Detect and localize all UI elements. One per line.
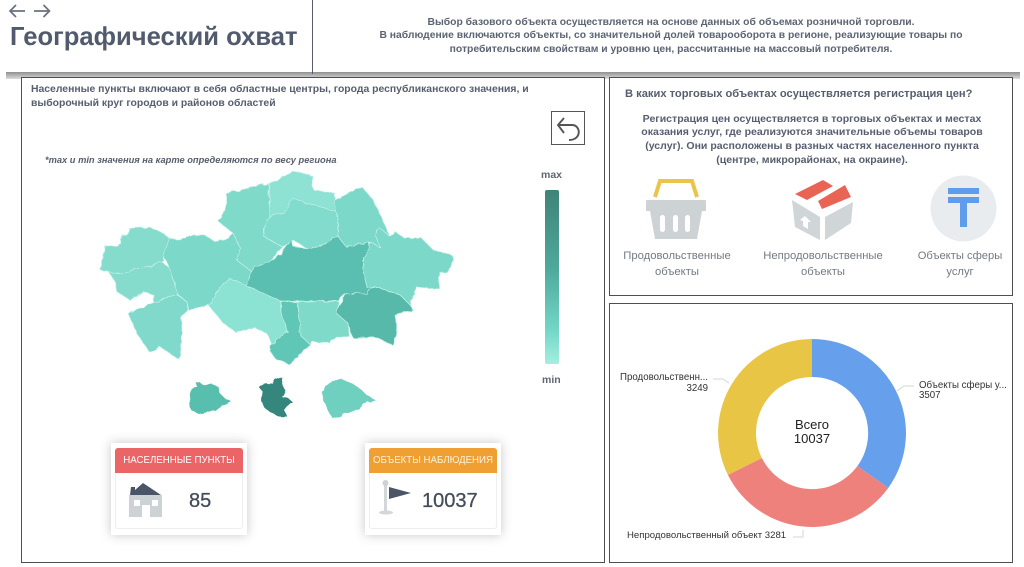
icon: undo button <box>551 111 585 145</box>
city: Almaty city <box>258 377 292 417</box>
region: Almaty <box>337 286 413 345</box>
title: Географический охват <box>10 22 298 50</box>
map description: выборочный круг городов и районов областей <box>31 98 276 109</box>
icon: back and forward arrows <box>8 4 51 18</box>
label: non-food objects <box>763 250 883 278</box>
label: services value: Объекты сферы у... <box>919 380 1007 391</box>
header description <box>379 16 963 55</box>
panel description <box>641 112 983 166</box>
region: Zhambyl <box>297 301 350 345</box>
header description: В наблюдение включаются объекты, со значительной долей товарооборота в регионе, реализующие товары по <box>379 30 963 41</box>
card header <box>369 448 497 473</box>
label: food value: 3249 <box>686 382 708 394</box>
label: service objects: Объекты сферы <box>918 250 1002 262</box>
panel: donut chart <box>609 303 1013 563</box>
map description <box>31 84 529 109</box>
label: food objects <box>623 250 731 278</box>
legend gradient bar <box>545 190 559 364</box>
stat card: settlements <box>111 443 247 535</box>
region: Turkistan <box>269 302 311 365</box>
label: service objects <box>918 250 1002 278</box>
region: Karaganda <box>245 235 373 301</box>
leader lines <box>713 379 914 537</box>
map footnote: *max и min значения на карте определяются по весу региона <box>45 155 337 165</box>
map of regions <box>99 170 454 418</box>
card header <box>115 448 243 473</box>
label: food objects: Продовольственные <box>623 250 731 262</box>
header description: потребительским свойствам и уровню цен, рассчитанные на массовый потребителя. <box>450 44 892 55</box>
label: non-food objects: Непродовольственные <box>763 250 883 262</box>
panel description: Регистрация цен осуществляется в торговых объектах и местах <box>643 112 981 124</box>
objects value: 10037 <box>422 490 478 512</box>
region: East Kazakhstan <box>363 228 453 305</box>
city: Shymkent <box>321 378 375 417</box>
region: North Kazakhstan <box>269 172 337 217</box>
card header: НАСЕЛЕННЫЕ ПУНКТЫ <box>123 455 235 466</box>
header divider <box>312 0 313 74</box>
panel description: оказания услуг, где реализуются значительные объемы товаров <box>641 126 983 138</box>
label: food value <box>620 372 708 394</box>
icon: basket <box>646 179 706 239</box>
label: food value: Продовольственн... <box>620 372 708 383</box>
region: Mangystau <box>128 295 187 359</box>
label: services value <box>919 380 1007 401</box>
panel description: (центре, микрорайонах, на окраине). <box>716 154 908 166</box>
legend label max: max <box>541 169 562 181</box>
label: non-food objects: объекты <box>801 266 845 278</box>
panel: geographic map <box>21 77 605 563</box>
donut chart <box>713 339 914 538</box>
donut center total: 10037 <box>794 431 830 446</box>
header band shadow <box>6 72 1020 79</box>
settlements value: 85 <box>189 490 211 512</box>
region: Kostanay <box>218 183 283 272</box>
segment: food 3249 <box>718 339 812 475</box>
panel: where prices are registered <box>609 77 1013 296</box>
region: Atyrau <box>108 262 178 303</box>
region: Kyzylorda <box>208 278 287 344</box>
label: non-food value: Непродовольственный объект 3281 <box>627 530 786 541</box>
icon: flag <box>379 480 411 514</box>
panel description: (услуг). Они расположены в разных частях населенного пункта <box>645 140 979 152</box>
stat card: observation objects <box>365 443 501 535</box>
label: services value: 3507 <box>919 390 941 401</box>
donut center total <box>794 417 830 446</box>
panel heading: В каких торговых объектах осуществляется регистрация цен? <box>625 88 972 100</box>
header description: Выбор базового объекта осуществляется на основе данных об объемах розничной торговли. <box>427 16 915 28</box>
region: West Kazakhstan <box>100 227 169 275</box>
segment: non-food 3281 <box>728 458 888 527</box>
city: Astana <box>188 382 232 414</box>
region: Akmola <box>264 198 339 248</box>
label: food objects: объекты <box>655 266 699 278</box>
icon: box <box>792 180 853 240</box>
segment: services 3507 <box>812 339 906 488</box>
donut center total: Всего <box>795 417 829 432</box>
card header: ОБЪЕКТЫ НАБЛЮДЕНИЯ <box>373 455 493 466</box>
icon: tenge circle <box>930 176 996 242</box>
region: Pavlodar <box>335 187 390 247</box>
map description: Населенные пункты включают в себя областные центры, города республиканского значения, и <box>31 84 529 95</box>
label: service objects: услуг <box>946 266 974 278</box>
regions group <box>100 172 453 417</box>
region: Aktobe <box>163 233 252 310</box>
icon: house <box>129 483 162 517</box>
legend label min: min <box>542 374 561 386</box>
